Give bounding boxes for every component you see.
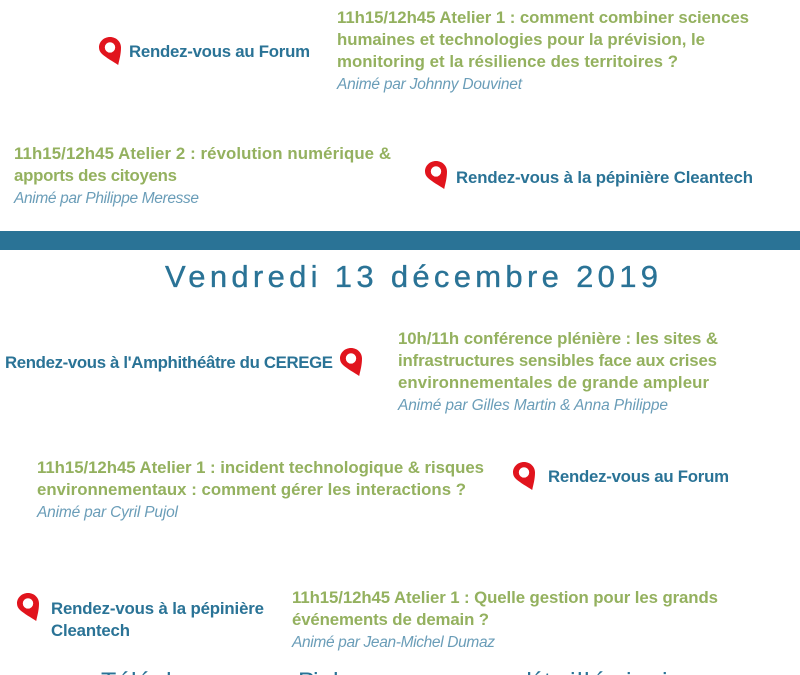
workshop text: Atelier 2: apports des citoyens <box>14 166 177 185</box>
icon: map pin Cleantech 2 <box>17 593 39 621</box>
workshop text: incident technologique: 11h15/12h45 Atelier 1 : incident technologique & risques <box>37 458 484 477</box>
icon: map pin Amphithéâtre <box>340 348 362 376</box>
workshop text: Atelier 1: humaines et technologies pour la prévision, le <box>337 30 705 49</box>
location: pépinière Cleantech 2: Rendez-vous à la pépinière <box>51 599 264 618</box>
workshop text: grands événements <box>291 588 718 651</box>
icon: map pin Forum 2 <box>513 462 535 490</box>
icon: map pin Cleantech <box>425 161 447 189</box>
workshop text: Atelier 1 <box>336 8 749 93</box>
session: Atelier 1 grands événements <box>17 588 718 651</box>
icon: map pin Forum <box>99 37 121 65</box>
workshop text: Atelier 1: Animé par Johnny Douvinet <box>336 76 523 93</box>
workshop text: incident technologique <box>36 458 484 521</box>
conference text: 10h/11h conférence plénière : les sites & <box>398 329 718 348</box>
session: Atelier 1 technologies <box>99 8 749 93</box>
conference text <box>397 329 718 414</box>
workshop text: Atelier 2 <box>13 144 391 207</box>
workshop text: Atelier 2: 11h15/12h45 Atelier 2 : révolution numérique & <box>14 144 391 163</box>
location: pépinière Cleantech 2 <box>51 599 264 640</box>
workshop text: Atelier 1: 11h15/12h45 Atelier 1 : comment combiner sciences <box>337 8 749 27</box>
conference text: Animé par Gilles Martin & Anna Philippe <box>397 397 668 414</box>
location: Amphithéâtre: Rendez-vous à l'Amphithéâtre du CEREGE <box>5 353 333 372</box>
day heading: Vendredi 13 décembre 2019 <box>165 259 658 294</box>
location: Forum: Rendez-vous au Forum <box>129 42 310 61</box>
location: Forum 2: Rendez-vous au Forum <box>548 467 729 486</box>
workshop text: Atelier 1: monitoring et la résilience des territoires ? <box>337 52 678 71</box>
session: conférence plénière <box>5 329 718 414</box>
workshop text: Atelier 2: Animé par Philippe Meresse <box>13 190 199 207</box>
divider band <box>0 231 800 250</box>
workshop text: incident technologique: environnementaux : comment gérer les interactions ? <box>37 480 466 499</box>
workshop text: incident technologique: Animé par Cyril Pujol <box>36 504 179 521</box>
session: Atelier 1 incident technologique <box>36 458 729 521</box>
workshop text: grands événements: 11h15/12h45 Atelier 1 : Quelle gestion pour les grands <box>292 588 718 607</box>
conference text: infrastructures sensibles face aux crises <box>398 351 717 370</box>
location: pépinière Cleantech: Rendez-vous à la pépinière Cleantech <box>456 168 753 187</box>
workshop text: grands événements: événements de demain ? <box>292 610 489 629</box>
workshop text: grands événements: Animé par Jean-Michel Dumaz <box>291 634 495 651</box>
location: pépinière Cleantech 2: Cleantech <box>51 621 130 640</box>
session: Atelier 2 citoyens <box>13 144 753 207</box>
conference text: environnementales de grande ampleur <box>398 373 709 392</box>
